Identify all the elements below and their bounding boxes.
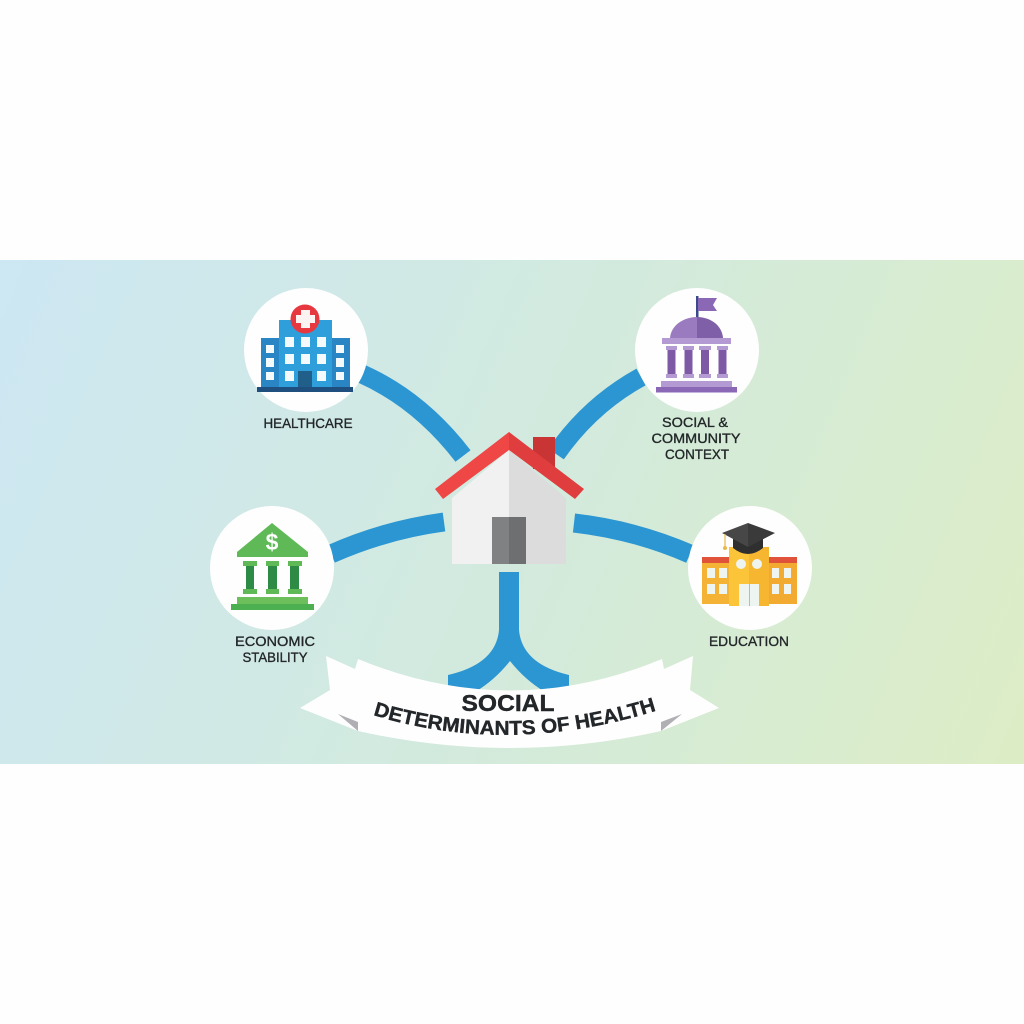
title ribbon [300, 656, 719, 748]
icon: civic building [656, 296, 737, 392]
node: economic stability [210, 506, 334, 665]
label: social and community context: SOCIAL & [662, 414, 729, 430]
label: social and community context: CONTEXT [665, 446, 729, 462]
title text: DETERMINANTS OF HEALTH [374, 698, 656, 735]
node: social and community context [635, 288, 759, 462]
label: social and community context [652, 414, 741, 462]
background band [0, 260, 1024, 764]
icon: bank [231, 523, 314, 610]
node: healthcare [244, 288, 368, 431]
central house icon [435, 432, 584, 564]
title text: SOCIAL [462, 690, 554, 716]
label: social and community context: COMMUNITY [652, 430, 741, 446]
label: economic stability: STABILITY [242, 649, 308, 665]
label: education: EDUCATION [709, 633, 789, 649]
node: education [688, 506, 812, 649]
label: economic stability: ECONOMIC [235, 633, 315, 649]
label: healthcare: HEALTHCARE [264, 415, 352, 431]
icon: hospital [257, 304, 353, 392]
label: economic stability [235, 633, 315, 665]
icon: bank: $ [266, 529, 279, 555]
icon: school with graduation cap [702, 523, 797, 606]
connectors: blue curved arms [331, 374, 690, 692]
